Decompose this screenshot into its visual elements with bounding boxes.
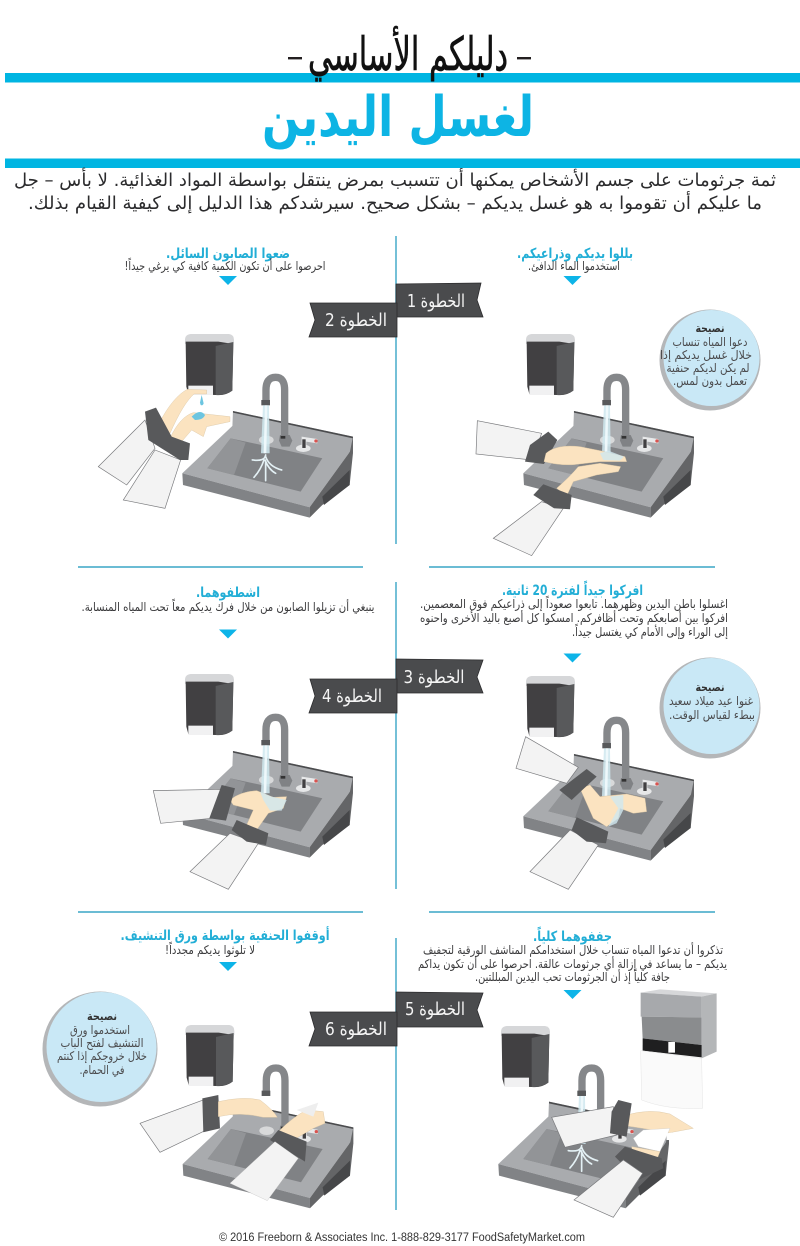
tip bubble: نصيحة bbox=[87, 1009, 117, 1023]
ribbon: step 3: الخطوة 3 bbox=[404, 667, 464, 688]
illustration: rinsing hands bbox=[153, 674, 353, 889]
tip bubble: نصيحة bbox=[696, 680, 724, 694]
heading: جففوهما كلياً. bbox=[533, 926, 612, 945]
instruction: لا تلوثوا يديكم مجدداً! bbox=[165, 941, 255, 958]
instructions bbox=[418, 942, 727, 985]
ribbon: step 3 bbox=[396, 659, 483, 693]
instructions: يديكم – ما يساعد في إزالة أي جرثومات عالقة. احرصوا على أن تكون يداكم bbox=[418, 956, 727, 972]
arrow bbox=[219, 630, 237, 638]
tip bubble: نصيحة bbox=[696, 321, 724, 335]
illustration: closing the tap bbox=[140, 1025, 353, 1208]
panel: step 6 turn off tap bbox=[42, 926, 353, 1208]
illustration: soap dispenser and hands bbox=[98, 334, 353, 518]
paper towel dispenser bbox=[641, 989, 717, 1109]
ribbon: step 2 bbox=[309, 303, 397, 337]
instruction: ينبغي أن تزيلوا الصابون من خلال فرك يديكم معاً تحت المياه المنسابة. bbox=[82, 598, 374, 615]
ribbon: step 1: الخطوة 1 bbox=[407, 291, 465, 312]
intro text: ثمة جرثومات على جسم الأشخاص يمكنها أن تتسبب بمرض ينتقل بواسطة المواد الغذائية. لا بأس – جل bbox=[14, 167, 776, 191]
title text: دليلكم الأساسي bbox=[308, 25, 508, 82]
instruction: احرصوا على أن تكون الكمية كافية كي يرغي جيداً! bbox=[124, 257, 326, 274]
tip bubble: خلال غسل يديكم إذا bbox=[660, 348, 752, 362]
instructions: تذكروا أن تدعوا المياه تنساب خلال استخدامكم المناشف الورقية لتجفيف bbox=[423, 942, 723, 958]
instructions: إلى الوراء وإلى الأمام كي يغتسل جيداً. bbox=[572, 623, 728, 640]
tip bubble: غنوا عيد ميلاد سعيد bbox=[669, 694, 753, 709]
grid dividers bbox=[78, 236, 715, 1210]
step ribbons bbox=[309, 283, 483, 1046]
tip bubble bbox=[660, 310, 760, 410]
arrow bbox=[564, 990, 582, 999]
heading: أوقفوا الحنفية بواسطة ورق التنشيف. bbox=[120, 926, 330, 944]
tip bubble: ببطء لقياس الوقت. bbox=[669, 708, 755, 723]
illustration: scrubbing hands bbox=[516, 676, 694, 889]
arrow bbox=[564, 276, 582, 285]
arrow bbox=[564, 654, 582, 662]
heading: ضعوا الصابون السائل. bbox=[166, 246, 290, 262]
ribbon: step 4 bbox=[309, 679, 397, 713]
ribbon: step 6 bbox=[309, 1012, 397, 1046]
intro text: ما عليكم أن تقوموا به هو غسل يديكم – بشكل صحيح. سيرشدكم هذا الدليل إلى كيفية القيام بذلك. bbox=[28, 191, 762, 214]
footer copyright: © 2016 Freeborn & Associates Inc. 1-888-829-3177 FoodSafetyMarket.com bbox=[219, 1232, 585, 1244]
second blue bar bbox=[5, 158, 800, 168]
illustration: drying hands bbox=[498, 1026, 693, 1217]
tip bubble: دعوا المياه تنساب bbox=[672, 335, 748, 350]
tip bubble: التنشيف لفتح الباب bbox=[60, 1036, 144, 1050]
arrow bbox=[219, 276, 237, 285]
ribbon: step 2: الخطوة 2 bbox=[325, 310, 387, 331]
tip bubble bbox=[42, 992, 158, 1106]
instructions: افركوا بين أصابعكم وتحت أظافركم. امسكوا كل أصبع باليد الأخرى واحنوه bbox=[420, 610, 728, 626]
heading: بللوا يديكم وذراعيكم. bbox=[517, 246, 633, 262]
tip bubble: تعمل بدون لمس. bbox=[673, 374, 747, 389]
illustration: sink and hands bbox=[476, 334, 694, 556]
panel: step 5 dry bbox=[418, 926, 727, 1217]
arrow bbox=[219, 962, 237, 971]
tip bubble bbox=[660, 658, 760, 758]
panel: step 1 wet hands bbox=[476, 246, 760, 556]
ribbon: step 4: الخطوة 4 bbox=[322, 686, 382, 707]
ribbon: step 6: الخطوة 6 bbox=[325, 1019, 387, 1040]
panel: step 4 rinse bbox=[82, 585, 374, 889]
heading: اشطفوهما. bbox=[196, 585, 260, 601]
intro text bbox=[14, 167, 776, 214]
panel: step 3 lather bbox=[420, 580, 760, 889]
ribbon: step 1 bbox=[396, 283, 483, 317]
panel: step 2 apply soap bbox=[98, 246, 353, 518]
tip bubble: استخدموا ورق bbox=[70, 1023, 130, 1038]
tip bubble: لم يكن لديكم حنفية bbox=[666, 361, 750, 376]
main heading: handwashing: لغسل اليدين bbox=[262, 85, 534, 150]
heading: افركوا جيداً لفترة 20 ثانية. bbox=[502, 580, 643, 599]
instructions bbox=[420, 595, 728, 640]
instructions: جافة كلياً إذ أن الجرثومات تحب اليدين المبللتين. bbox=[475, 968, 670, 985]
title dashes bbox=[288, 57, 531, 59]
tip bubble: خلال خروجكم إذا كنتم bbox=[57, 1049, 147, 1064]
tip bubble: في الحمام. bbox=[80, 1063, 124, 1077]
ribbon: step 5 bbox=[396, 992, 483, 1027]
instructions: اغسلوا باطن اليدين وظهرهما. تابعوا صعوداً إلى ذراعيكم فوق المعصمين. bbox=[420, 595, 728, 612]
top blue bar bbox=[5, 73, 800, 82]
ribbon: step 5: الخطوة 5 bbox=[405, 999, 465, 1020]
instruction: استخدموا الماء الدافئ. bbox=[528, 259, 620, 274]
